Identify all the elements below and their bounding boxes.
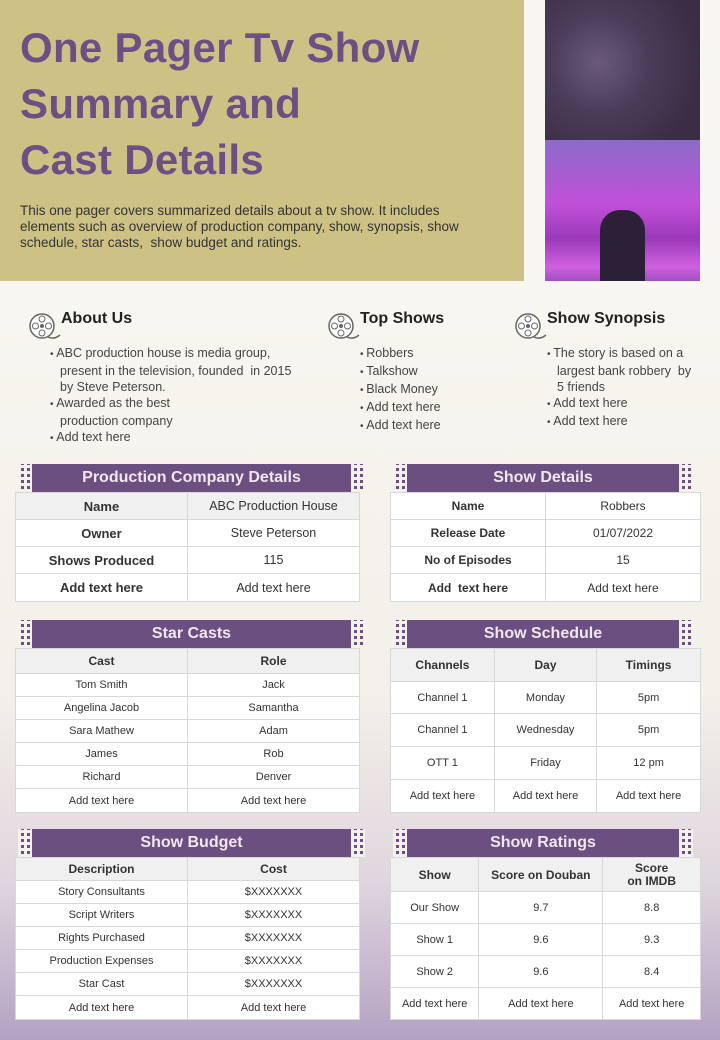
panel: Show Schedule: OTT 1 <box>427 757 458 769</box>
section: Show Synopsis: Show Synopsis <box>547 310 665 327</box>
section: Top Shows: Add text here <box>366 400 441 414</box>
section: Show Synopsis: Add text here <box>553 414 628 428</box>
panel: Show Budget: $XXXXXXX <box>245 932 302 944</box>
panel: Star Casts: Sara Mathew <box>69 725 134 737</box>
panel: Show Ratings: 9.7 <box>533 902 548 914</box>
panel: Show Budget: Script Writers <box>69 909 134 921</box>
panel: Show Budget: Show Budget <box>140 834 243 851</box>
panel: Star Casts: Samantha <box>248 702 299 714</box>
panel: Show Schedule: 5pm <box>638 692 659 704</box>
panel: Star Casts: Richard <box>83 771 120 783</box>
intro text: This one pager covers summarized details about a tv show. It includes elements such as overview of production company, show, synopsis, show schedule, star casts, show budget and ratings. <box>20 203 459 250</box>
section: Top Shows: Talkshow <box>366 364 418 378</box>
section: Top Shows: Black Money <box>366 382 438 396</box>
panel: Star Casts: James <box>85 748 118 760</box>
panel: Show Schedule: Show Schedule <box>484 625 602 642</box>
panel: Show Details: 01/07/2022 <box>593 526 653 540</box>
panel: Show Schedule <box>390 620 701 813</box>
panel: Show Schedule: Timings <box>626 658 671 672</box>
panel: Production Company Details: Add text here <box>60 580 143 595</box>
panel: Show Ratings: Show 1 <box>416 934 453 946</box>
panel: Production Company Details: Add text here <box>236 580 311 594</box>
panel: Star Casts: Tom Smith <box>76 679 127 691</box>
title: One Pager Tv Show <box>20 24 420 71</box>
panel: Star Casts: Jack <box>262 679 285 691</box>
panel: Show Ratings: 9.6 <box>533 934 548 946</box>
section: About Us: ABC production house is media group, present in the television, founded in 2015 by Steve Peterson. <box>56 346 291 394</box>
panel: Show Ratings: 8.4 <box>644 966 659 978</box>
panel: Show Budget: Description <box>68 862 134 876</box>
panel: Show Details: Show Details <box>493 469 593 486</box>
section: About Us: production company <box>60 414 173 428</box>
section: Show Synopsis: The story is based on a largest bank robbery by 5 friends <box>553 346 691 394</box>
panel: Show Budget: Star Cast <box>79 978 124 990</box>
panel: Star Casts: Denver <box>256 771 291 783</box>
panel: Show Ratings: Score <box>635 860 668 874</box>
panel: Show Details: Release Date <box>431 526 505 540</box>
panel: Show Budget: $XXXXXXX <box>245 909 302 921</box>
section: About Us <box>29 310 291 444</box>
panel: Show Budget: Story Consultants <box>58 886 145 898</box>
icon: film reel <box>328 313 360 339</box>
panel: Star Casts <box>15 620 363 813</box>
panel: Show Budget: Production Expenses <box>50 955 153 967</box>
panel: Star Casts: Add text here <box>69 794 134 806</box>
panel: Show Ratings: 9.3 <box>644 934 659 946</box>
panel: Show Ratings: Score on Douban <box>491 868 591 882</box>
panel: Show Budget: Rights Purchased <box>58 932 145 944</box>
title: Summary and <box>20 80 301 127</box>
section: Top Shows <box>328 310 444 432</box>
section: Show Synopsis <box>515 310 692 428</box>
panel: Show Budget <box>15 829 365 1020</box>
panel: Show Ratings: 9.6 <box>533 966 548 978</box>
panel: Production Company Details: Production Company Details <box>82 469 301 486</box>
panel: Production Company Details: Owner <box>81 526 122 540</box>
section: Top Shows: Add text here <box>366 418 441 432</box>
panel: Production Company Details: Name <box>84 498 119 514</box>
panel: Show Details: Robbers <box>600 499 646 513</box>
panel: Production Company Details: ABC Production House <box>209 499 338 513</box>
panel: Show Ratings: Show <box>419 868 451 882</box>
panel: Show Schedule: Wednesday <box>517 724 574 736</box>
section: Top Shows: Robbers <box>366 346 414 360</box>
icon: film reel <box>29 313 60 339</box>
panel: Star Casts: Adam <box>259 725 288 737</box>
section: About Us: About Us <box>61 310 132 327</box>
panel: Show Budget: Cost <box>260 862 287 876</box>
panel: Show Details: Add text here <box>587 580 659 594</box>
panel: Show Schedule: Friday <box>530 757 561 769</box>
panel: Show Ratings: 8.8 <box>644 902 659 914</box>
panel: Show Schedule: Channels <box>415 658 469 672</box>
panel: Show Schedule: Monday <box>526 692 565 704</box>
panel: Star Casts: Angelina Jacob <box>64 702 139 714</box>
section: About Us: Awarded as the best <box>56 396 170 410</box>
section: Show Synopsis: Add text here <box>553 396 628 410</box>
panel: Production Company Details: Steve Peterson <box>231 526 316 540</box>
panel: Show Schedule: Add text here <box>513 790 578 802</box>
panel: Show Ratings: Add text here <box>619 998 684 1010</box>
panel: Star Casts: Rob <box>263 748 284 760</box>
section: Top Shows: Top Shows <box>360 310 444 327</box>
panel: Star Casts: Cast <box>88 654 114 668</box>
panel: Show Schedule: Day <box>534 658 556 672</box>
panel: Show Schedule: Channel 1 <box>417 692 468 704</box>
title <box>20 24 420 183</box>
panel: Show Details: Add text here <box>428 580 508 594</box>
hero panel <box>0 0 524 281</box>
panel: Show Ratings: Show Ratings <box>490 834 596 851</box>
panel: Show Details <box>390 464 701 602</box>
photo: stage <box>545 140 700 281</box>
panel: Show Schedule: Add text here <box>616 790 681 802</box>
panel: Production Company Details: Shows Produced <box>49 552 154 568</box>
panel: Star Casts: Star Casts <box>152 625 231 642</box>
panel: Show Ratings: Our Show <box>410 902 459 914</box>
icon: film reel <box>515 313 546 339</box>
panel: Show Details: No of Episodes <box>424 553 512 567</box>
panel: Show Ratings: Show 2 <box>416 966 453 978</box>
panel: Show Details: 15 <box>616 553 630 567</box>
panel: Show Details: Name <box>452 499 484 513</box>
panel: Show Budget: Add text here <box>241 1002 306 1014</box>
panel: Show Schedule: Channel 1 <box>417 724 468 736</box>
panel: Show Budget: $XXXXXXX <box>245 978 302 990</box>
panel: Show Ratings: on IMDB <box>627 874 676 888</box>
panel: Star Casts: Add text here <box>241 794 306 806</box>
panel: Show Schedule: 12 pm <box>633 757 664 769</box>
panel: Production Company Details: 115 <box>264 553 283 567</box>
panel: Show Budget: $XXXXXXX <box>245 886 302 898</box>
panel: Show Budget: $XXXXXXX <box>245 955 302 967</box>
panel: Show Ratings: Add text here <box>508 998 574 1010</box>
panel: Show Ratings: Add text here <box>402 998 467 1010</box>
section: About Us: Add text here <box>56 430 131 444</box>
panel: Production Company Details <box>15 464 363 602</box>
panel: Show Budget: Add text here <box>69 1002 134 1014</box>
panel: Show Schedule: Add text here <box>410 790 475 802</box>
panel: Show Schedule: 5pm <box>638 724 659 736</box>
photo: concert <box>545 0 700 140</box>
panel: Show Ratings <box>390 829 701 1020</box>
title: Cast Details <box>20 136 264 183</box>
panel: Star Casts: Role <box>260 654 286 668</box>
